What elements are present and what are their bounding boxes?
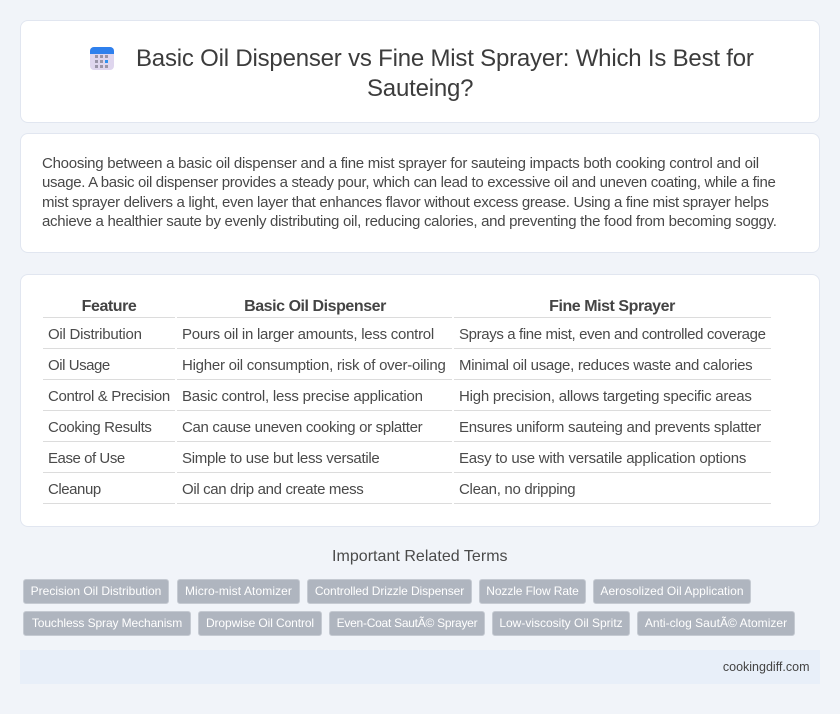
tag: Micro-mist Atomizer [185, 584, 292, 598]
table: Clean, no dripping [459, 481, 575, 498]
table: Cleanup [48, 481, 101, 498]
footer bar [20, 650, 820, 684]
tag: Anti-clog SautÃ© Atomizer [645, 616, 787, 630]
tag: Low-viscosity Oil Spritz [499, 616, 623, 630]
table: High precision, allows targeting specific areas [459, 388, 752, 405]
tags [23, 579, 795, 636]
table: Oil Distribution [48, 326, 142, 343]
intro text: Choosing between a basic oil dispenser and a fine mist sprayer for sauteing impacts both cooking control and oil [42, 154, 759, 172]
tag: Even-Coat SautÃ© Sprayer [337, 616, 477, 630]
table: Easy to use with versatile application options [459, 450, 746, 467]
table: Sprays a fine mist, even and controlled coverage [459, 326, 766, 343]
tag: Dropwise Oil Control [206, 616, 314, 630]
tag [492, 611, 630, 636]
tag [307, 579, 472, 604]
intro text: usage. A basic oil dispenser provides a steady pour, which can lead to excessive oil and uneven coating, while a fine [42, 174, 776, 191]
tag [479, 579, 586, 604]
table: Higher oil consumption, risk of over-oiling [182, 357, 446, 374]
tag [637, 611, 795, 636]
tag [198, 611, 322, 636]
tag: Aerosolized Oil Application [600, 584, 744, 598]
header panel [20, 20, 820, 123]
table: Oil can drip and create mess [182, 481, 363, 498]
tag [23, 611, 191, 636]
table: Oil Usage [48, 357, 110, 374]
intro panel [20, 133, 820, 253]
tag: Precision Oil Distribution [31, 584, 161, 598]
intro text [42, 154, 777, 230]
table: Pours oil in larger amounts, less control [182, 326, 434, 343]
tag [329, 611, 485, 636]
header: Feature: Feature [82, 298, 136, 315]
tag: Touchless Spray Mechanism [32, 616, 182, 630]
intro text: achieve a healthier saute by evenly distributing oil, reducing calories, and preventing the food from becoming soggy. [42, 213, 777, 230]
table: Can cause uneven cooking or splatter [182, 419, 422, 436]
tag [23, 579, 169, 604]
intro text: mist sprayer delivers a light, even layer that enhances flavor without excess grease. Using a fine mist sprayer helps [42, 194, 768, 210]
table: Basic control, less precise application [182, 388, 423, 405]
tag: Nozzle Flow Rate [486, 584, 579, 598]
table: Minimal oil usage, reduces waste and calories [459, 357, 752, 374]
tag [177, 579, 300, 604]
header: Basic Oil Dispenser: Basic Oil Dispenser [244, 298, 386, 315]
table panel [20, 274, 820, 527]
icon: calendar [90, 47, 114, 70]
title line 2: Sauteing? [367, 75, 473, 102]
related terms heading: Important Related Terms [332, 548, 508, 565]
table: Cooking Results [48, 419, 152, 436]
title: Basic Oil Dispenser vs Fine Mist Sprayer: Which Is Best for [136, 45, 754, 72]
tag: Controlled Drizzle Dispenser [315, 584, 464, 598]
footer source: cookingdiff.com [723, 660, 810, 674]
table: Ensures uniform sauteing and prevents splatter [459, 419, 761, 436]
table [43, 298, 771, 504]
table: Simple to use but less versatile [182, 450, 379, 467]
tag [593, 579, 751, 604]
table: Control & Precision [48, 388, 170, 405]
table: Ease of Use [48, 450, 125, 467]
header: Fine Mist Sprayer: Fine Mist Sprayer [549, 298, 675, 315]
